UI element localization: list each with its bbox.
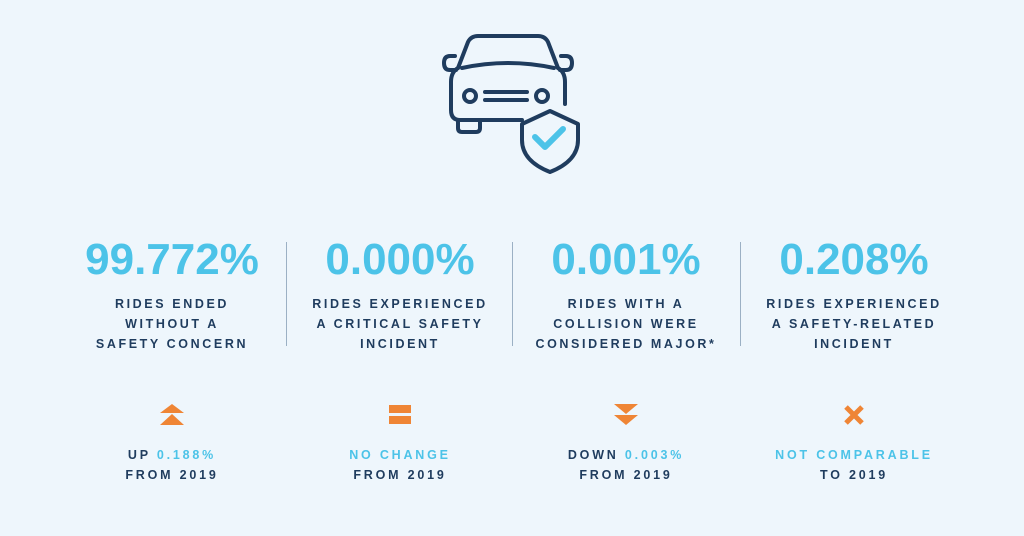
change: down <box>568 404 684 482</box>
stat: 0.208% <box>766 235 942 351</box>
change: up <box>125 404 219 482</box>
stat: 99.772%: RIDES ENDED <box>115 297 229 311</box>
stat: 0.000%: 0.000% <box>325 235 475 284</box>
stat: 0.208%: 0.208% <box>779 235 929 284</box>
stat: 0.000%: RIDES EXPERIENCED <box>312 297 488 311</box>
stat: 0.208%: A SAFETY-RELATED <box>772 317 936 331</box>
stat: 0.000%: A CRITICAL SAFETY <box>316 317 484 331</box>
stat: 0.001%: CONSIDERED MAJOR* <box>535 337 717 351</box>
stat: 0.001%: RIDES WITH A <box>568 297 684 311</box>
change: no change: FROM 2019 <box>353 468 447 482</box>
icon: car with shield <box>442 34 580 174</box>
stat: 0.001%: COLLISION WERE <box>553 317 699 331</box>
change: up: FROM 2019 <box>125 468 219 482</box>
change: no change <box>349 405 451 482</box>
stat: 0.000%: INCIDENT <box>360 337 440 351</box>
stat: 99.772% <box>85 235 259 351</box>
stat: 99.772%: WITHOUT A <box>125 317 219 331</box>
change: not comparable: NOT COMPARABLE <box>775 448 933 462</box>
stat: 99.772%: 99.772% <box>85 235 259 284</box>
change: down: DOWN 0.003% <box>568 448 684 462</box>
change: down: FROM 2019 <box>579 468 673 482</box>
stat: 0.208%: INCIDENT <box>814 337 894 351</box>
change: up: UP 0.188% <box>128 448 216 462</box>
stat: 0.208%: RIDES EXPERIENCED <box>766 297 942 311</box>
stat: 0.001% <box>535 235 717 351</box>
stat: 0.000% <box>312 235 488 351</box>
stat: 0.001%: 0.001% <box>551 235 701 284</box>
change: not comparable: TO 2019 <box>820 468 888 482</box>
change: no change: NO CHANGE <box>349 448 451 462</box>
stat: 99.772%: SAFETY CONCERN <box>96 337 248 351</box>
change: not comparable <box>775 405 933 482</box>
